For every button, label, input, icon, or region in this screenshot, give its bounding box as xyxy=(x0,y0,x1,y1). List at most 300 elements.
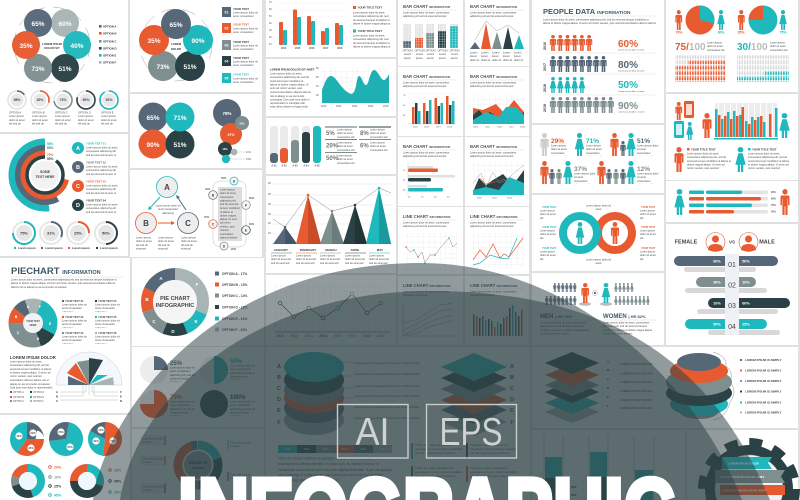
ABCD list xyxy=(72,142,120,214)
month captions: Lorem ipsum dolor sit amet elit sed do eiusmod xyxy=(271,254,291,265)
segmented donut: B xyxy=(145,297,149,302)
pie one xyxy=(18,430,36,448)
horizontal bar set: 40 xyxy=(403,180,406,182)
comparison bars: 50% xyxy=(742,260,750,264)
left letters: B xyxy=(277,375,281,381)
gauge legend: Lorem ipsum xyxy=(72,246,90,250)
heading: Lorem ipsum dolor sit amet, consectetur adipiscing elit sed do eiusmod tempor. xyxy=(470,11,516,18)
side columns: There are many variations of passages of Lorem Ipsum available but the majority have suffered. xyxy=(415,443,462,455)
donut: YOUR TEXT xyxy=(26,320,40,323)
heading: LINE CHART INFORMATION xyxy=(403,283,450,288)
diamond labels: LOREM IPSUM DOLOR xyxy=(620,398,653,402)
month captions: Lorem ipsum dolor sit amet elit sed do eiusmod xyxy=(296,254,316,265)
side columns: There are many variations of passages of Lorem Ipsum available but the majority have suffered. xyxy=(470,443,517,455)
panel: test tubes xyxy=(532,430,685,500)
text list with colored number boxes: 03 xyxy=(225,44,228,48)
horizontal bar set: 60 xyxy=(403,190,406,192)
bars: 2015 xyxy=(413,126,419,128)
bar labels: 20 xyxy=(269,36,272,39)
teal area: 2016 xyxy=(368,105,374,108)
bars xyxy=(279,10,343,45)
month captions: MAY xyxy=(377,248,383,252)
teal area: 80 xyxy=(316,67,319,70)
pie 50 xyxy=(200,356,228,384)
diamond labels: LOREM IPSUM DOLOR xyxy=(620,362,653,366)
panel: stacked layers and table xyxy=(266,347,530,500)
option ring list: 20% xyxy=(231,247,237,251)
year labels: 2018 xyxy=(543,84,547,92)
panel: line chart multi series xyxy=(398,276,463,345)
comparison bars: 10% xyxy=(713,302,721,306)
pie 25 xyxy=(140,356,168,384)
ring callouts: Lorem ipsum dolor sit amet xyxy=(230,441,252,448)
heading: Lorem ipsum dolor sit amet, consectetur adipiscing elit sed do eiusmod tempor. xyxy=(470,221,516,228)
badge: AI: AI xyxy=(356,411,390,454)
bar labels: 60 xyxy=(269,8,272,11)
middle labels: Lorem Ipsum is simply dummy text of the printing xyxy=(354,372,420,376)
gender header: MALE xyxy=(759,240,775,246)
men and women captions: WOMEN | HR 82% xyxy=(603,314,646,320)
axis labels xyxy=(268,181,271,235)
panel: six circle percentages xyxy=(0,0,128,132)
row dividers and notes: Lorem ipsum dolor sit amet xyxy=(618,110,645,114)
disc legend: LOREM IPSUM IS SIMPLY xyxy=(745,379,782,383)
panel: men and women xyxy=(532,273,664,345)
right letters: D xyxy=(510,397,514,403)
triangles xyxy=(273,188,391,244)
ABC cycle: Lorem ipsum dolor sit amet elit sed do eiusmod xyxy=(181,236,197,250)
right letters: F xyxy=(510,420,514,426)
disc stack xyxy=(666,352,734,420)
donut: C xyxy=(17,331,20,335)
lorem block: OPTION C xyxy=(13,401,24,403)
left letters: D xyxy=(277,397,281,403)
panel: linked rings xyxy=(532,195,664,271)
circle cluster: DOLOR SIT xyxy=(44,46,60,50)
side labels: Lorem ipsum dolor sit amet xyxy=(586,258,611,265)
row dividers and notes: Lorem ipsum dolor sit amet xyxy=(618,70,645,72)
panel: horizontal bars xyxy=(398,137,463,206)
panel: four circles and bubbles: 71% xyxy=(173,115,187,122)
percentages xyxy=(551,138,650,173)
option ring list xyxy=(204,176,255,251)
option ring list: E xyxy=(245,228,248,232)
side labels xyxy=(540,204,658,265)
panel: stacked area chart xyxy=(465,67,529,136)
bubble sizes: 32% xyxy=(239,122,245,126)
percentages: 90% xyxy=(618,101,638,112)
comparison bars: 04 xyxy=(728,324,736,331)
pie labels xyxy=(15,426,117,452)
value strip: 60% xyxy=(322,447,329,451)
bubble sizes: 11% xyxy=(246,150,252,154)
ring xyxy=(178,445,218,485)
panel: four circles and bubbles xyxy=(130,94,262,168)
right letters: B xyxy=(510,375,514,381)
panel: five circle percentages with text list xyxy=(130,0,262,92)
title blocks with figures: YOUR TITLE TEXT xyxy=(691,148,716,152)
men and women captions: Lorem ipsum dolor sit amet, consectetur adipiscing elit, sed do eiusmod tempor incididunt ut labore et dolore magna aliqua. Ut enim ad minim veniam. xyxy=(540,321,590,335)
option ring list: 70% xyxy=(204,215,210,219)
disc legend: LOREM IPSUM IS SIMPLY xyxy=(745,410,782,414)
polyline with markers xyxy=(278,292,383,320)
donut: D xyxy=(37,337,40,341)
horizontal bar set: 10 xyxy=(408,196,411,198)
heading: PIECHART INFORMATION xyxy=(11,266,101,277)
progress rings row xyxy=(8,91,118,109)
panel: diamonds and disc stack xyxy=(532,347,798,428)
circle cluster xyxy=(12,9,91,82)
men and women captions: MEN | HR 70% xyxy=(540,314,573,320)
ABCD list: B xyxy=(76,165,80,171)
month captions xyxy=(271,248,390,266)
pie 70 30 xyxy=(686,6,714,34)
rings xyxy=(563,216,632,250)
pie 25 75 xyxy=(748,6,778,34)
bar legend text: YOUR TITLE TEXT xyxy=(358,29,382,33)
segmented donut: F xyxy=(196,282,199,287)
areas: 2015 xyxy=(485,126,491,128)
gauge row: 50% xyxy=(102,230,110,236)
row dividers and notes xyxy=(545,48,656,114)
ABC cycle: B xyxy=(143,219,149,228)
heading xyxy=(470,4,525,19)
percentages: 51% xyxy=(637,138,650,145)
gauge row: 75% xyxy=(20,230,28,236)
row dividers and notes: Lorem ipsum dolor sit amet xyxy=(618,48,645,52)
gauge legend: Lorem ipsum xyxy=(18,246,36,250)
bars: 50 xyxy=(403,105,406,107)
percentages: 29% xyxy=(551,138,564,145)
bars: 2017 xyxy=(436,126,442,128)
bar labels: 50 xyxy=(269,15,272,18)
badge: EPS: EPS xyxy=(440,411,502,454)
line xyxy=(403,233,458,270)
ABCD list: D xyxy=(76,203,80,209)
heading xyxy=(470,214,525,229)
ABCD list: A xyxy=(76,146,80,152)
value strip xyxy=(278,445,392,453)
donut two xyxy=(74,468,100,494)
lorem block: OPTION F xyxy=(33,401,44,403)
fan semicircle chart: A xyxy=(56,390,59,394)
options grid: YOUR TEXT 04 xyxy=(98,299,117,303)
donut: E xyxy=(49,322,52,326)
option ring list: D xyxy=(223,244,226,248)
gauge row xyxy=(13,222,117,244)
options legend xyxy=(215,272,248,332)
years: 2012 xyxy=(290,334,298,338)
pie labels: 50% xyxy=(110,439,116,443)
triangles xyxy=(470,21,524,49)
donut: HERE xyxy=(30,324,37,327)
side columns: There are many variations of passages of Lorem Ipsum available but the majority have suffered. xyxy=(415,466,462,478)
middle labels: Lorem Ipsum is simply dummy text of the printing xyxy=(354,394,420,398)
block columns xyxy=(403,24,458,48)
heading: Lorem ipsum dolor sit amet, consectetur adipiscing elit sed do eiusmod tempor. xyxy=(403,81,449,88)
circle cluster: 73% xyxy=(31,66,45,73)
diamond labels: D xyxy=(607,386,610,390)
diamond labels: C xyxy=(607,377,610,381)
options grid: YOUR TEXT 05 xyxy=(98,315,117,319)
fraction text xyxy=(170,359,255,416)
options legend: OPTION E - 13% xyxy=(222,317,247,321)
options legend: OPTION A - 17% xyxy=(222,272,247,276)
diamond labels: LOREM IPSUM DOLOR xyxy=(620,372,653,376)
comparison bars xyxy=(674,254,790,335)
progress bars: 90% xyxy=(771,198,777,200)
ABC cycle: Lorem ipsum dolor sit amet elit sed do eiusmod xyxy=(158,236,174,250)
panel: percent pies xyxy=(132,258,264,346)
donut: B xyxy=(15,315,18,319)
title blocks with figures: YOUR TITLE TEXT xyxy=(752,148,777,152)
disc legend: LOREM IPSUM IS SIMPLY xyxy=(745,390,782,394)
gauge row: 25% xyxy=(74,230,82,236)
people row 2016 xyxy=(550,35,592,51)
panel: five circle percentages with text list: 51% xyxy=(183,64,197,71)
comparison bars: 50% xyxy=(713,322,721,326)
teal area: 20 xyxy=(316,94,319,97)
donut legends: 20% xyxy=(54,466,62,470)
horizontal bar set: 30 xyxy=(434,196,437,198)
ABC cycle: Lorem ipsum dolor sit amet elit sed do eiusmod xyxy=(136,236,152,250)
years: 2018 xyxy=(377,334,385,338)
ABCD list: YOUR TEXT 01 xyxy=(86,142,106,146)
value strip: 40% xyxy=(379,447,386,451)
diamond labels: B xyxy=(607,368,610,372)
legend: options: OPTION A xyxy=(103,25,116,29)
panel: concentric radial chart: 90% xyxy=(47,157,54,161)
panel: people and columns xyxy=(666,94,798,180)
badge: EPS xyxy=(426,404,516,458)
left letters: F xyxy=(277,420,281,426)
people matrix teal xyxy=(737,55,789,82)
diamond labels: F xyxy=(607,404,609,408)
heading xyxy=(11,266,123,290)
fraction text: 50% xyxy=(230,359,243,365)
ring callouts: Lorem ipsum dolor sit amet xyxy=(230,473,252,480)
heading: Lorem ipsum dolor sit amet, consectetur adipiscing elit sed do. xyxy=(403,290,449,297)
scores: 75/100 xyxy=(675,42,706,53)
text list with colored number boxes: 01 xyxy=(225,10,228,14)
radial rings xyxy=(12,142,78,208)
title blocks with figures xyxy=(674,147,792,172)
option ring list: 30% xyxy=(249,222,255,226)
month captions: Lorem ipsum dolor sit amet elit sed do eiusmod xyxy=(320,254,340,265)
heading: BAR CHART INFORMATION xyxy=(403,144,450,149)
tubes xyxy=(544,436,654,500)
panel: triangle chart with line xyxy=(266,176,396,273)
side labels: YOUR TEXT xyxy=(641,226,656,229)
heading: Lorem ipsum dolor sit amet, consectetur adipiscing elit sed do eiusmod tempor. xyxy=(470,81,516,88)
areas: 2016 xyxy=(497,126,503,128)
comparison bars: 10% xyxy=(742,280,750,284)
areas: 2014 xyxy=(473,126,479,128)
bubble sizes xyxy=(213,99,252,163)
heading xyxy=(403,214,458,229)
progress bars: 45% xyxy=(771,210,777,214)
ABC cycle: C xyxy=(185,219,191,228)
donut legends: 25% xyxy=(54,484,62,488)
years xyxy=(276,334,385,338)
value strip: 20% xyxy=(303,447,310,451)
areas xyxy=(473,94,526,128)
fraction text: 25% xyxy=(170,361,183,367)
right letters: C xyxy=(510,386,514,392)
figures beside pies: 75% xyxy=(780,30,786,34)
heading: PEOPLE DATA INFORMATION xyxy=(543,7,631,16)
year labels xyxy=(543,42,547,112)
heading: LINE CHART INFORMATION xyxy=(470,283,517,288)
bar labels: 2015 xyxy=(295,47,301,50)
years: 2016 xyxy=(348,334,356,338)
text list with colored number boxes: YOUR TEXT xyxy=(233,40,249,44)
pie three xyxy=(96,430,114,448)
panel: bar chart grouped xyxy=(398,67,463,136)
side labels: YOUR TEXT xyxy=(542,206,557,209)
bars: 30 xyxy=(403,115,406,117)
cylinder stats: 8% xyxy=(360,131,369,137)
value strip: 50% xyxy=(360,447,367,451)
gauge legend: Lorem ipsum xyxy=(100,246,118,250)
option ring list: 60% xyxy=(249,196,255,200)
heading: BAR CHART INFORMATION xyxy=(470,74,517,79)
years: 2015 xyxy=(334,334,342,338)
scores: 30/100 xyxy=(737,42,768,53)
donut legends: 30% xyxy=(114,490,122,494)
men and women captions xyxy=(540,314,656,336)
horizontal bar set: 40 xyxy=(447,196,450,198)
side labels: YOUR TEXT xyxy=(542,247,557,250)
years: 2013 xyxy=(305,334,313,338)
segmented donut: D xyxy=(171,329,175,334)
ring captions xyxy=(9,111,120,125)
side columns xyxy=(411,443,518,484)
heading xyxy=(470,144,525,159)
month captions: Lorem ipsum dolor sit amet elit sed do eiusmod xyxy=(345,254,365,265)
block captions: OPTION Lorem ipsum xyxy=(450,49,459,60)
banners: LOREM IPSUM DOLOR SIT AMET xyxy=(720,475,765,479)
cylinder stats: 6% xyxy=(360,144,369,150)
panel: fraction pies xyxy=(132,347,264,427)
axis labels: 50 xyxy=(268,192,271,196)
scores xyxy=(675,42,768,53)
heading: LINE CHART INFORMATION xyxy=(470,214,517,219)
fan semicircle chart: B xyxy=(56,394,59,398)
option ring list: C xyxy=(212,222,215,226)
options legend: OPTION C - 14% xyxy=(222,294,248,298)
year labels: 2016 xyxy=(543,42,547,50)
ABC cycle: A xyxy=(164,183,170,192)
chart: 2014 xyxy=(507,198,513,200)
cylinders: A-02 xyxy=(281,164,287,168)
options grid: YOUR TEXT 02 xyxy=(65,315,84,319)
options grid: YOUR TEXT 06 xyxy=(98,331,117,335)
diamond stack xyxy=(545,352,599,423)
disc legend: LOREM IPSUM IS SIMPLY xyxy=(745,400,782,404)
heading xyxy=(543,7,656,26)
teal area: 60 xyxy=(316,76,319,79)
segmented donut: C xyxy=(152,319,156,324)
side labels: YOUR TEXT xyxy=(641,247,656,250)
panel: area chart: LOREM IPSUM DOLOR SIT AMET xyxy=(270,68,315,72)
teal area: 2012 xyxy=(336,105,342,108)
score notes: Lorem ipsum dolor sit amet consectetur elit xyxy=(707,41,724,52)
donut legends: 45% xyxy=(114,480,122,484)
bar labels: 40 xyxy=(269,22,272,25)
chart xyxy=(473,162,525,200)
chart: 2010 xyxy=(477,198,483,200)
bubble sizes: 47% xyxy=(227,133,235,137)
years: 2017 xyxy=(363,334,371,338)
block captions: OPTION Lorem ipsum xyxy=(438,49,447,60)
horizontal bar set: 20 xyxy=(403,170,406,172)
gender header xyxy=(675,232,775,252)
options grid: YOUR TEXT 03 xyxy=(65,331,84,335)
figures beside pies: 30% xyxy=(718,30,724,34)
month captions: FEBRUARY xyxy=(300,248,316,252)
value strip: 35% xyxy=(341,447,348,451)
heading: BAR CHART INFORMATION xyxy=(403,4,450,9)
teal area: 2010 xyxy=(321,105,327,108)
banners xyxy=(715,457,785,495)
percentages: 80% xyxy=(618,60,638,71)
right letters: E xyxy=(510,408,514,414)
pie labels: 25% xyxy=(58,430,64,434)
fan semicircle chart: C xyxy=(56,399,59,403)
ABCD list: YOUR TEXT 02 xyxy=(86,160,106,164)
axis labels: 40 xyxy=(268,202,271,206)
legend: options: OPTION F xyxy=(103,61,116,65)
lorem block: OPTION B xyxy=(13,397,24,399)
diamond labels: LOREM IPSUM DOLOR xyxy=(620,380,653,384)
cylinder stats: 5% xyxy=(326,131,335,137)
ABCD list: YOUR TEXT 04 xyxy=(86,198,106,202)
circle cluster: 40% xyxy=(70,43,84,50)
disc legend xyxy=(740,358,782,414)
legend: options: OPTION D xyxy=(103,47,117,51)
heading: Lorem ipsum dolor sit amet, consectetur adipiscing elit sed do eiusmod tempor. xyxy=(403,221,449,228)
cylinders: A-01 xyxy=(271,164,277,168)
figures beside pies: 35% xyxy=(738,30,744,34)
paired columns xyxy=(714,103,778,140)
side columns: There are many variations of passages of Lorem Ipsum available but the majority have suffered. xyxy=(470,466,517,478)
cylinder stats: 20% xyxy=(326,144,339,150)
text list with colored number boxes: YOUR TEXT xyxy=(233,72,249,76)
comparison bars: 60% xyxy=(742,302,750,306)
value strip: 10% xyxy=(284,447,291,451)
progress rings row: 73% xyxy=(60,98,66,102)
cylinder stats: 50% xyxy=(326,156,339,162)
diamond labels: LOREM IPSUM DOLOR xyxy=(620,389,653,393)
horizontal bar set: 20 xyxy=(421,196,424,198)
middle labels: Lorem Ipsum is simply dummy text of the printing xyxy=(354,361,420,365)
ring callouts: Lorem ipsum dolor sit amet xyxy=(142,437,164,444)
axis labels: 10 xyxy=(268,231,271,235)
heading xyxy=(403,74,458,89)
fraction text: 75% xyxy=(170,395,183,401)
people row 2018 xyxy=(550,77,585,93)
heading: Lorem ipsum dolor sit amet, consectetur adipiscing elit sed do. xyxy=(470,290,516,297)
options legend: OPTION B - 13% xyxy=(222,283,248,287)
fan semicircle chart: F xyxy=(120,390,122,394)
pie labels: 40% xyxy=(16,434,22,438)
comparison bars: 25% xyxy=(742,322,750,326)
panel: bar chart triangles xyxy=(465,0,529,66)
heading: BAR CHART INFORMATION xyxy=(470,4,517,9)
ABC cycle xyxy=(136,176,200,250)
areas: 2017 xyxy=(509,126,515,128)
